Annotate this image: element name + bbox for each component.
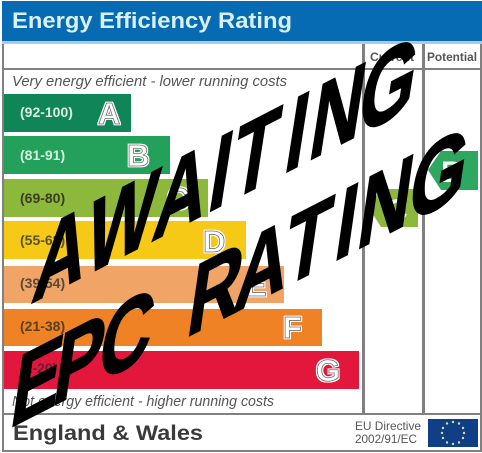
icon: EU flag — [428, 419, 478, 447]
band C: (69-80) — [20, 190, 65, 206]
band A: (92-100) — [20, 104, 73, 120]
EU directive text: EU Directive — [355, 419, 421, 433]
title banner: Energy Efficiency Rating — [12, 8, 292, 33]
title banner — [2, 1, 482, 44]
current rating arrow: C — [386, 194, 408, 227]
band B: B — [127, 138, 149, 173]
band E — [4, 266, 284, 303]
band A — [4, 94, 131, 132]
EU directive text: 2002/91/EC — [355, 432, 417, 446]
band F: F — [283, 310, 302, 345]
band E: E — [246, 268, 267, 303]
band D: D — [203, 224, 225, 259]
band D — [4, 221, 246, 259]
current rating arrow — [369, 189, 418, 227]
band D: (55-68) — [20, 232, 65, 248]
band A: A — [98, 96, 120, 131]
band G: G — [316, 353, 340, 388]
EU directive text — [355, 419, 421, 446]
overlay text: awaiting: AWAITING — [26, 9, 427, 328]
potential rating arrow: B — [441, 156, 463, 189]
band B: (81-91) — [20, 147, 65, 163]
band E: (39-54) — [20, 275, 65, 291]
band B — [4, 136, 170, 174]
band C — [4, 179, 208, 217]
bottom note: Not energy efficient - higher running costs — [12, 394, 274, 410]
column heading: potential: Potential — [427, 52, 477, 64]
footer region label: England & Wales — [13, 421, 203, 445]
potential rating arrow — [428, 151, 478, 190]
column heading: current: Current — [370, 52, 414, 64]
overlay text: EPC rating: EPC RATING — [5, 102, 476, 451]
top note: Very energy efficient - lower running costs — [12, 74, 287, 90]
band F — [4, 309, 322, 346]
band G — [4, 351, 359, 389]
band C: C — [167, 181, 189, 216]
band F: (21-38) — [20, 318, 65, 334]
band G: (1-20) — [20, 360, 57, 376]
